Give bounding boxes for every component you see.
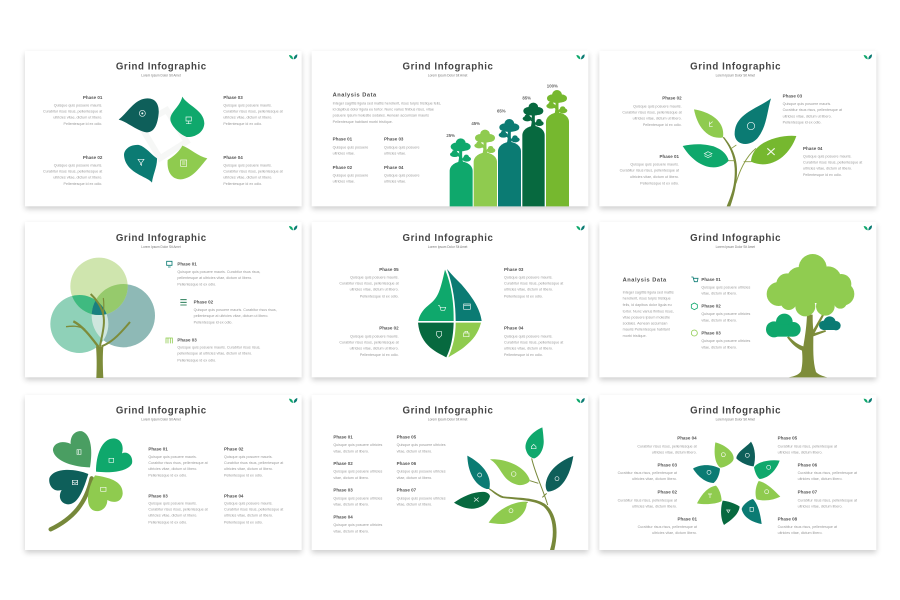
- bar chart: trees and bars: [450, 90, 569, 206]
- text: phase 03: Quisque quis posuere mauris.: [223, 103, 272, 107]
- text: phase 04: Phase 04: [333, 515, 353, 520]
- logo icon: [576, 54, 585, 59]
- text: phase 03: Phase 03: [333, 488, 353, 493]
- text: phase 01: [620, 154, 679, 185]
- text: phase 07: Quisque quis posuere ultricies: [397, 496, 446, 500]
- text: phase 04: Phase 04: [677, 436, 697, 441]
- title: Grind Infographic: [690, 62, 781, 73]
- text: phase 04: [333, 515, 382, 533]
- text: phase 01: [701, 277, 750, 296]
- chart: tree: [766, 254, 854, 377]
- text: phase 02: Pellentesque id ex odio.: [360, 353, 399, 357]
- card: water drop leaf: [312, 222, 588, 380]
- text: phase 02: Curabitur risus risus, pellentesque at: [43, 169, 102, 173]
- text: phase 02: [43, 155, 103, 186]
- text: phase 01: Quisque quis posuere: [333, 145, 368, 149]
- text: phase 04: Curabitur risus risus, pellentesque at: [803, 160, 862, 164]
- text: phase 01: Quisque quis posuere mauris.: [54, 103, 102, 107]
- text: analysis body: id dapibus dolor ligula eu tortor. Nunc varius finibus risus, vitae: [333, 108, 434, 112]
- text: phase 04: Curabitur risus risus, pellentesque at: [224, 508, 283, 512]
- text: phase 01: Quisque quis posuere ultricies: [333, 443, 382, 447]
- text: phase 02: Quisque quis posuere mauris.: [633, 104, 682, 108]
- text: phase 01: Curabitur risus risus, pellentesque at: [43, 109, 102, 113]
- text: phase 02: Quisque quis posuere mauris. Curabitur risus risus,: [194, 308, 277, 312]
- text: analysis body: Pellentesque habitant morbi tristique.: [333, 120, 393, 124]
- card: clover: [25, 395, 302, 553]
- text: phase 03: Quisque quis posuere ultricies: [701, 339, 750, 343]
- text: phase 01: Phase 01: [333, 137, 353, 142]
- title: Grind Infographic: [116, 62, 207, 73]
- label: 45%: 45%: [471, 121, 480, 126]
- text: phase 04: Phase 04: [384, 165, 404, 170]
- text: phase 02: [701, 304, 750, 322]
- chart: four part leaf: [418, 269, 482, 357]
- text: phase 03: vitae, dictum ut libero.: [333, 503, 369, 507]
- text: phase 03: ultricies vitae, dictum ut libero.: [504, 288, 553, 292]
- text: phase 02: Quisque quis posuere ultricies: [701, 312, 750, 316]
- text: phase 04: [224, 493, 283, 524]
- text: phase 01: Phase 01: [660, 154, 679, 159]
- text: phase 02: ultricies vitae, dictum libero.: [632, 504, 677, 508]
- text: phase 08: Curabitur risus risus, pellentesque at: [778, 525, 837, 529]
- text: phase 03: Phase 03: [504, 267, 524, 272]
- text: phase 07: Phase 07: [798, 490, 818, 495]
- text: phase 04: Quisque quis posuere mauris.: [803, 154, 852, 158]
- text: phase 01: Pellentesque id ex odio.: [148, 474, 187, 478]
- label: 25%: 25%: [446, 133, 455, 138]
- text: phase 04: Quisque quis posuere ultricies: [333, 523, 382, 527]
- text: phase 03: [384, 137, 420, 156]
- text: phase 07: vitae, dictum ut libero.: [397, 503, 432, 507]
- text: phase 03: Pellentesque id ex odio.: [223, 122, 262, 126]
- text: phase 04: Curabitur risus risus, pellentesque at: [223, 169, 283, 173]
- text: phase 03: Curabitur risus risus, pellentesque at: [223, 109, 283, 113]
- text: phase 01: [333, 137, 368, 156]
- text: analysis body: morbi tristique.: [623, 334, 647, 338]
- text: phase 02: [622, 96, 682, 127]
- logo icon: [289, 225, 297, 230]
- chart: four leaf clover: [49, 431, 132, 529]
- text: phase 01: Phase 01: [148, 447, 168, 452]
- title: Grind Infographic: [402, 62, 493, 73]
- text: phase 07: [397, 488, 446, 507]
- chart: ring of eight leaves: [693, 442, 780, 525]
- text: phase 03: ultricies vitae, dictum ut libero.: [783, 114, 832, 118]
- text: phase 06: ultricies vitae, dictum libero.: [798, 477, 843, 481]
- text: phase 02: ultricies vitae, dictum ut libero.: [224, 467, 273, 471]
- text: phase 05: ultricies vitae, dictum ut libero.: [350, 288, 399, 292]
- text: phase 03: ultricies vitae, dictum libero.: [632, 477, 677, 481]
- subtitle: Lorem Ipsum Dolor Sit Amet: [716, 74, 755, 78]
- text: phase 02: ultricies vitae, dictum ut libero.: [53, 175, 102, 179]
- text: phase 01: [177, 261, 260, 287]
- text: phase 05: Curabitur risus risus, pellentesque at: [778, 444, 837, 448]
- text: phase 06: Curabitur risus risus, pellentesque at: [798, 471, 857, 475]
- label: 65%: 65%: [497, 109, 506, 114]
- text: phase 05: Quisque quis posuere ultricies: [397, 443, 446, 447]
- title: Grind Infographic: [402, 406, 493, 417]
- text: phase 03: Pellentesque id ex odio.: [783, 120, 821, 124]
- text: phase 03: Phase 03: [783, 93, 803, 98]
- text: phase 02: Phase 02: [333, 461, 353, 466]
- text: phase 01: ultricies vitae, dictum ut libero.: [53, 115, 102, 119]
- text: phase 03: Phase 03: [701, 331, 721, 336]
- text: phase 01: [148, 447, 208, 478]
- text: phase 05: [397, 435, 446, 453]
- text: phase 04: Curabitur risus risus, pellentesque at: [504, 340, 563, 344]
- text: phase 08: Phase 08: [778, 517, 798, 522]
- chart: branch with leaves: [454, 427, 573, 550]
- text: phase 02: Quisque quis posuere mauris.: [350, 334, 399, 338]
- text: phase 02: Quisque quis posuere: [333, 174, 368, 178]
- text: phase 02: Pellentesque id ex odio.: [224, 474, 263, 478]
- text: phase 02: Phase 02: [333, 165, 353, 170]
- text: phase 03: [223, 95, 283, 126]
- text: phase 03: [783, 93, 842, 124]
- text: phase 02: [333, 461, 382, 480]
- text: phase 08: [778, 517, 837, 535]
- text: phase 01: Phase 01: [83, 95, 103, 100]
- text: phase 02: Pellentesque id ex odio.: [194, 320, 232, 324]
- text: phase 04: [803, 146, 862, 177]
- icon: check circle: [691, 330, 697, 336]
- subtitle: Lorem Ipsum Dolor Sit Amet: [428, 74, 468, 78]
- text: phase 02: [333, 165, 368, 184]
- text: phase 01: Quisque quis posuere mauris.: [148, 455, 197, 459]
- text: phase 01: Phase 01: [177, 261, 197, 266]
- text: phase 02: Quisque quis posuere ultricies: [333, 470, 382, 474]
- card: overlapping circle tree: [25, 222, 302, 380]
- logo icon: [864, 225, 872, 230]
- text: phase 02: Curabitur risus risus, pellentesque at: [622, 110, 682, 114]
- text: phase 02: Curabitur risus risus, pellentesque at: [339, 340, 399, 344]
- text: phase 02: [224, 447, 283, 478]
- text: phase 04: ultricies vitae, dictum libero.: [652, 450, 697, 454]
- title: Grind Infographic: [690, 406, 781, 417]
- label: 100%: 100%: [547, 83, 558, 88]
- text: phase 02: ultricies vitae, dictum ut libero.: [350, 346, 399, 350]
- text: phase 07: [798, 490, 857, 508]
- icon: bridge: [166, 338, 172, 343]
- text: phase 01: ultricies vitae, dictum libero.: [652, 531, 697, 535]
- card: four petals: [25, 51, 302, 209]
- label: 85%: 85%: [522, 96, 531, 101]
- text: phase 03: Quisque quis posuere mauris.: [148, 502, 197, 506]
- text: phase 02: pellentesque at ultricies vitae, dictum ut libero.: [194, 314, 268, 318]
- text: phase 05: Phase 05: [397, 435, 417, 440]
- text: phase 01: vitae, dictum ut libero.: [333, 449, 369, 453]
- card: flower ring: [599, 395, 876, 553]
- subtitle: Lorem Ipsum Dolor Sit Amet: [141, 74, 181, 78]
- text: phase 01: [638, 517, 697, 535]
- text: phase 03: [618, 462, 677, 481]
- text: phase 01: Curabitur risus risus, pellentesque at: [620, 169, 679, 173]
- text: phase 01: Phase 01: [333, 435, 353, 440]
- chart: petal cycle: [119, 97, 207, 183]
- subtitle: Lorem Ipsum Dolor Sit Amet: [428, 418, 468, 422]
- text: phase 01: Quisque quis posuere mauris.: [630, 163, 679, 167]
- text: phase 02: Phase 02: [658, 490, 677, 495]
- text: phase 03: pellentesque at ultricies vitae, dictum ut libero.: [177, 352, 252, 356]
- text: phase 04: [637, 436, 697, 454]
- text: phase 04: Pellentesque id ex odio.: [803, 173, 842, 177]
- text: phase 04: Pellentesque id ex odio.: [223, 182, 262, 186]
- heading: analysis data: Analysis Data: [333, 93, 377, 99]
- text: phase 06: Phase 06: [798, 462, 818, 467]
- text: phase 04: Curabitur risus risus, pellentesque at: [637, 444, 697, 448]
- text: phase 04: vitae, dictum ut libero.: [333, 529, 369, 533]
- text: phase 04: Quisque quis posuere mauris.: [224, 502, 273, 506]
- text: phase 02: [618, 490, 677, 508]
- text: phase 01: vitae, dictum ut libero.: [701, 292, 737, 296]
- text: phase 02: [194, 300, 277, 324]
- text: phase 02: Curabitur risus risus, pellentesque at: [618, 498, 677, 502]
- text: phase 02: Phase 02: [83, 155, 103, 160]
- text: phase 01: Phase 01: [701, 277, 721, 282]
- text: phase 05: Phase 05: [778, 436, 798, 441]
- card: growing plant: [599, 51, 876, 209]
- text: phase 03: [701, 331, 750, 349]
- text: phase 02: Quisque quis posuere mauris.: [224, 455, 273, 459]
- logo icon: [289, 54, 297, 59]
- text: phase 03: Quisque quis posuere mauris. Curabitur risus risus,: [177, 346, 260, 350]
- text: phase 04: [223, 155, 283, 186]
- text: phase 03: Quisque quis posuere mauris.: [504, 276, 553, 280]
- chart: plant leaves: [683, 98, 796, 206]
- logo icon: [864, 54, 872, 59]
- text: phase 05: [339, 267, 399, 298]
- text: phase 03: Curabitur risus risus, pellentesque at: [618, 471, 677, 475]
- icon: cart: [691, 277, 698, 282]
- text: phase 02: Phase 02: [662, 96, 682, 101]
- text: phase 08: ultricies vitae, dictum libero.: [778, 531, 823, 535]
- text: phase 03: [177, 337, 260, 362]
- text: phase 01: Pellentesque id ex odio.: [64, 122, 102, 126]
- text: phase 03: Curabitur risus risus, pellentesque at: [504, 282, 563, 286]
- text: phase 02: Phase 02: [379, 326, 399, 331]
- subtitle: Lorem Ipsum Dolor Sit Amet: [716, 418, 755, 422]
- text: analysis body: tortor. Nunc varius finibus risus,: [623, 309, 674, 313]
- icon: sliders: [180, 300, 187, 305]
- text: phase 04: Phase 04: [224, 493, 244, 498]
- logo icon: [864, 398, 872, 403]
- text: phase 07: ultricies vitae, dictum libero.: [798, 504, 843, 508]
- logo icon: [576, 398, 585, 403]
- text: phase 04: Phase 04: [504, 326, 524, 331]
- text: phase 03: ultricies vitae, dictum ut libero.: [223, 115, 272, 119]
- text: phase 04: ultricies vitae.: [384, 180, 406, 184]
- card: six leaf branch: [312, 395, 588, 553]
- text: phase 05: [778, 436, 837, 454]
- text: phase 03: Quisque quis posuere mauris.: [783, 102, 831, 106]
- text: phase 03: Phase 03: [658, 462, 677, 467]
- text: phase 01: pellentesque at ultricies vitae, dictum ut libero.: [177, 276, 252, 280]
- text: phase 04: Quisque quis posuere: [384, 174, 420, 178]
- text: phase 05: Phase 05: [379, 267, 399, 272]
- text: phase 02: Pellentesque id ex odio.: [643, 123, 682, 127]
- text: phase 04: ultricies vitae, dictum ut libero.: [224, 514, 273, 518]
- text: phase 03: Phase 03: [384, 137, 404, 142]
- text: phase 06: vitae, dictum ut libero.: [397, 476, 432, 480]
- text: analysis body: mauris Pellentesque habitant: [623, 328, 670, 332]
- text: phase 04: Quisque quis posuere mauris.: [504, 334, 553, 338]
- text: analysis body: posuere ipsum molestie sodales. Aenean accumsan mauris: [333, 114, 429, 118]
- subtitle: Lorem Ipsum Dolor Sit Amet: [716, 245, 755, 249]
- text: phase 02: Phase 02: [701, 304, 721, 309]
- text: phase 03: Pellentesque id ex odio.: [177, 358, 216, 362]
- text: phase 05: Quisque quis posuere mauris.: [350, 276, 399, 280]
- text: analysis body: hendrerit, risus turpis tristique: [623, 297, 671, 301]
- text: phase 01: ultricies vitae.: [333, 152, 355, 156]
- text: phase 02: Quisque quis posuere mauris.: [54, 163, 102, 167]
- title: Grind Infographic: [116, 233, 207, 244]
- card: tree bar chart: [312, 51, 588, 209]
- logo icon: [576, 225, 585, 230]
- text: phase 05: Curabitur risus risus, pellentesque at: [339, 282, 399, 286]
- text: phase 06: [798, 462, 857, 481]
- text: analysis body: felis, id dapibus dolor ligula eu: [623, 303, 672, 307]
- text: phase 03: ultricies vitae, dictum ut libero.: [148, 514, 197, 518]
- text: phase 06: [397, 461, 446, 480]
- text: phase 02: [339, 326, 399, 357]
- text: analysis body: Integer sagittis ligula sed mattis hendrerit, risus turpis tristique felis,: [333, 102, 441, 106]
- text: phase 02: ultricies vitae.: [333, 180, 355, 184]
- text: phase 04: ultricies vitae, dictum ut libero.: [504, 346, 553, 350]
- text: phase 03: Pellentesque id ex odio.: [148, 520, 187, 524]
- text: phase 01: ultricies vitae, dictum ut libero.: [630, 175, 679, 179]
- text: phase 03: Quisque quis posuere ultricies: [333, 496, 382, 500]
- icon: hexagon: [691, 303, 697, 310]
- icon: monitor: [167, 261, 172, 267]
- text: phase 03: Quisque quis posuere: [384, 145, 420, 149]
- text: analysis body: vitae posuere ipsum molestie: [623, 315, 670, 319]
- text: phase 03: Pellentesque id ex odio.: [504, 294, 543, 298]
- text: phase 04: Pellentesque id ex odio.: [224, 520, 263, 524]
- text: phase 03: [333, 488, 382, 507]
- text: phase 04: [504, 326, 563, 357]
- text: phase 04: ultricies vitae, dictum ut libero.: [803, 167, 852, 171]
- title: Grind Infographic: [402, 233, 493, 244]
- text: phase 04: ultricies vitae, dictum ut libero.: [223, 175, 272, 179]
- text: phase 03: Phase 03: [223, 95, 243, 100]
- text: phase 03: [148, 493, 208, 524]
- text: phase 03: Phase 03: [177, 337, 197, 342]
- text: phase 01: Curabitur risus risus, pellentesque at: [148, 461, 208, 465]
- text: phase 04: Pellentesque id ex odio.: [504, 353, 543, 357]
- text: phase 07: Curabitur risus risus, pellentesque at: [798, 498, 857, 502]
- subtitle: Lorem Ipsum Dolor Sit Amet: [141, 418, 181, 422]
- text: phase 02: vitae, dictum ut libero.: [333, 476, 369, 480]
- text: phase 01: [43, 95, 103, 126]
- text: phase 06: Quisque quis posuere ultricies: [397, 470, 446, 474]
- text: phase 05: Pellentesque id ex odio.: [360, 294, 399, 298]
- text: phase 02: Phase 02: [194, 300, 214, 305]
- text: phase 03: Curabitur risus risus, pellentesque at: [783, 108, 842, 112]
- logo icon: [289, 398, 297, 403]
- text: phase 02: Curabitur risus risus, pellentesque at: [224, 461, 283, 465]
- text: phase 03: ultricies vitae.: [384, 152, 406, 156]
- text: phase 04: [384, 165, 420, 184]
- card: big tree: [599, 222, 876, 380]
- text: analysis body: sodales. Aenean accumsan: [623, 321, 667, 325]
- text: phase 03: [504, 267, 563, 298]
- text: phase 03: Phase 03: [148, 493, 168, 498]
- text: phase 05: ultricies vitae, dictum libero.: [778, 450, 823, 454]
- text: phase 04: Phase 04: [803, 146, 823, 151]
- text: phase 03: Curabitur risus risus, pellentesque at: [148, 508, 208, 512]
- text: phase 01: Pellentesque id ex odio.: [177, 283, 216, 287]
- text: phase 01: [333, 435, 382, 453]
- text: phase 02: Phase 02: [224, 447, 244, 452]
- text: phase 05: vitae, dictum ut libero.: [397, 449, 432, 453]
- text: phase 01: Phase 01: [678, 517, 697, 522]
- title: Grind Infographic: [116, 406, 207, 417]
- text: phase 02: Pellentesque id ex odio.: [64, 182, 102, 186]
- text: analysis body: Integer sagittis ligula sed mattis: [623, 291, 674, 295]
- text: phase 01: Quisque quis posuere ultricies: [701, 286, 750, 290]
- text: phase 04: Phase 04: [223, 155, 243, 160]
- text: phase 01: Pellentesque id ex odio.: [640, 181, 679, 185]
- text: phase 06: Phase 06: [397, 461, 417, 466]
- text: phase 04: Quisque quis posuere mauris.: [223, 163, 272, 167]
- text: phase 03: vitae, dictum ut libero.: [701, 345, 737, 349]
- heading: analysis data: Analysis Data: [623, 278, 667, 284]
- text: phase 01: Quisque quis posuere mauris. Curabitur risus risus,: [177, 270, 260, 274]
- subtitle: Lorem Ipsum Dolor Sit Amet: [141, 245, 181, 249]
- text: phase 02: ultricies vitae, dictum ut libero.: [633, 116, 682, 120]
- chart: venn tree: [50, 258, 155, 378]
- text: phase 01: ultricies vitae, dictum ut libero.: [148, 467, 197, 471]
- text: phase 07: Phase 07: [397, 488, 417, 493]
- title: Grind Infographic: [690, 233, 781, 244]
- subtitle: Lorem Ipsum Dolor Sit Amet: [428, 245, 468, 249]
- text: phase 01: Curabitur risus risus, pellentesque at: [638, 525, 697, 529]
- text: phase 02: vitae, dictum ut libero.: [701, 318, 737, 322]
